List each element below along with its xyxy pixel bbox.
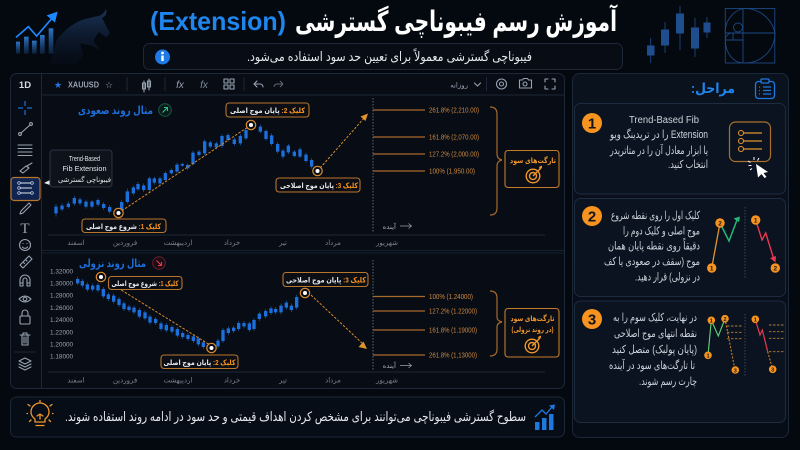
icon: smile: [20, 240, 30, 250]
icon: growth chart: [535, 404, 555, 430]
price axis: 1.28000: [50, 292, 74, 300]
target box: profit targets in downtrend: [505, 308, 559, 357]
heading: downtrend example: مثال روند نزولی: [79, 258, 146, 270]
diagram: third click: 2: [723, 317, 727, 323]
icon: golden spiral: [725, 8, 775, 63]
callout: click 1: کلیک 1: شروع موج اصلی: [112, 279, 179, 288]
step 2 text: در نزولی) قرار دهید.: [635, 272, 700, 284]
target box: profit targets: تارگت‌های سود: [510, 156, 556, 165]
tooltip: Trend-Based Fib Extension: Fib Extension: [62, 164, 106, 173]
left tool sidebar: [11, 101, 40, 370]
step 1 text: Trend-Based Fib: [629, 115, 699, 126]
icon: selected fib tool: [11, 178, 40, 200]
step 1 text: یا ابزار معادل آن را در متاتریدر: [609, 143, 708, 157]
step 3 text: (پایان پولبک) متصل کنید: [612, 344, 697, 356]
icon: pencil: [20, 203, 31, 214]
callout: click 3: [283, 272, 368, 286]
step 2 text: موج اصلی و کلیک دوم را: [623, 226, 700, 238]
months axis: اسفند: [67, 378, 85, 384]
months axis: فروردین: [113, 378, 137, 384]
icon: decorative candlesticks: [648, 6, 710, 63]
icon: trend line: [19, 123, 32, 135]
tooltip: Trend-Based Fib Extension: فیبوناچی گسترشی: [58, 175, 111, 184]
top toolbar: [19, 77, 555, 92]
subtitle bar: فیبوناچی گسترشی معمولاً برای تعیین حد سود استفاده می‌شود.: [247, 48, 532, 65]
top toolbar: روزانه: [450, 82, 468, 90]
icon: text tool: T: [20, 221, 30, 237]
months axis: اسفند: [67, 240, 85, 247]
point 1: [114, 208, 123, 218]
point 2: [207, 343, 216, 353]
price axis: [50, 268, 74, 360]
step 3 text: چارت رسم شوند.: [639, 376, 697, 388]
top toolbar: XAUUSD: [68, 80, 99, 90]
fib levels: bullish: 100% (1,950.00): [429, 168, 475, 176]
diagram: third click: 1: [710, 318, 713, 324]
months axis: فروردین: [113, 240, 137, 247]
fib levels: bearish: 261.8% (1,13000): [429, 352, 477, 360]
icon: horizontal lines: [18, 145, 32, 156]
price axis: 1.20000: [50, 342, 74, 348]
step 2 text: کلیک اول را روی نقطه شروع: [611, 210, 701, 222]
tip text: سطوح گسترشی فیبوناچی می‌توانند برای مشخص کردن اهداف قیمتی و حد سود در ادامه روند استفاده شوند.: [65, 409, 526, 425]
step 3 text: در نهایت، کلیک سوم را به: [613, 312, 697, 324]
step 2 text: [604, 210, 701, 284]
top toolbar: fx: [176, 80, 185, 91]
badge 2: 2: [588, 208, 596, 226]
diagram: third click: [704, 314, 784, 377]
diagram: click order: 1: [710, 266, 714, 272]
tooltip: Trend-Based Fib Extension: Trend-Based: [69, 154, 100, 163]
top toolbar: ★: [54, 80, 62, 90]
tooltip: Trend-Based Fib Extension: [44, 150, 112, 187]
point 2: [246, 120, 256, 130]
icon: up arrow: [159, 104, 171, 116]
icon: fib tool with cursor: [730, 122, 770, 178]
callout: click 2: کلیک 2: پایان موج اصلی: [164, 358, 236, 367]
title: (Extension): [150, 6, 286, 36]
future label: [383, 222, 412, 231]
target box: profit targets in downtrend: تارگت‌های سود: [510, 314, 555, 323]
top toolbar: 1D: [19, 80, 31, 91]
months axis: شهریور: [375, 378, 398, 384]
icon: eye: [19, 296, 31, 302]
diagram: third click: 3: [734, 368, 737, 374]
step 1 text: انتخاب کنید.: [668, 159, 708, 171]
diagram: third click: 1: [754, 318, 757, 324]
icon: down arrow: [153, 257, 165, 269]
icon: lock: [20, 310, 30, 324]
candlesticks: downtrend: [78, 277, 297, 352]
step 2 text: موج (سقف در صعودی یا کف: [604, 256, 700, 268]
badge 1: [582, 113, 602, 133]
months axis: مرداد: [325, 240, 341, 247]
icon: bull and rising chart: [16, 9, 110, 64]
panel: chart workspace: [10, 74, 564, 388]
months axis: [67, 378, 398, 384]
badge 3: [582, 309, 602, 329]
callout: click 3: کلیک 3: پایان موج اصلاحی: [280, 181, 359, 190]
step card 3: [574, 301, 786, 422]
callout: click 3: کلیک 3: پایان موج اصلاحی: [286, 276, 367, 284]
fib levels: bullish: 127.2% (2,000.00): [429, 152, 479, 158]
fib levels: bullish: 261.8% (2,210.00): [429, 108, 479, 114]
step 3 text: نقطه انتهای موج اصلاحی: [614, 328, 697, 340]
step 2 text: دقیقاً روی نقطه پایان همان: [608, 237, 700, 252]
months axis: اردیبهشت: [164, 240, 192, 247]
diagram: third click: 1: [706, 354, 710, 360]
badge 2: [582, 206, 602, 226]
months axis: خرداد: [224, 240, 240, 247]
fib levels: bearish: 127.2% (1.22000): [429, 308, 477, 316]
price axis: 1.22000: [50, 330, 74, 336]
step card 2: [574, 198, 786, 296]
heading: uptrend example: مثال روند صعودی: [78, 105, 153, 117]
dashed wave lines: [118, 288, 367, 349]
point 1: [96, 272, 106, 282]
callout: click 1: [82, 219, 166, 232]
fib levels: bearish: 161.8% (1.19000): [429, 328, 477, 334]
price axis: 1.30000: [50, 280, 74, 288]
step 1 text: Extension را در تریدینگ ویو: [609, 128, 708, 141]
icon: clipboard: [756, 79, 774, 98]
diagram: click order: 1: [754, 218, 758, 224]
diagram: click order: 2: [773, 266, 777, 272]
top toolbar: fx: [200, 80, 209, 91]
subtitle bar: [144, 44, 622, 70]
diagram: click order: [707, 207, 780, 279]
step card 1: [574, 104, 786, 194]
panel: bullish chart: [48, 98, 559, 247]
title: آموزش رسم فیبوناچی گسترشی: [295, 4, 618, 38]
icon: trash: [20, 333, 30, 345]
months axis: تیر: [278, 378, 287, 384]
callout: click 2: [161, 355, 238, 368]
heading: steps: مراحل:: [691, 80, 735, 97]
diagram: click order: 2: [718, 220, 722, 228]
callout: click 2: [226, 103, 309, 117]
fib levels: bearish: [373, 294, 477, 360]
target box: profit targets: [505, 150, 559, 188]
point 3: [300, 288, 310, 298]
icon: crosshair: [18, 101, 32, 115]
icon: layers: [19, 358, 31, 370]
callout: click 1: [108, 276, 182, 290]
panel: steps: [572, 74, 788, 438]
icon: pen tool: [20, 163, 32, 173]
panel: bottom tip bar: [10, 397, 564, 437]
icon: magnet: [20, 275, 30, 286]
fib levels: bullish: 161.8% (2,070.00): [429, 134, 479, 142]
icon: lightbulb: [27, 400, 53, 426]
icon: ruler: [20, 256, 32, 268]
months axis: [67, 240, 398, 247]
step 3 text: تا تارگت‌های سود در آینده: [609, 358, 695, 372]
icon: info: [155, 50, 170, 64]
callout: click 3: [276, 178, 360, 192]
dashed wave lines: [118, 114, 368, 213]
price axis: 1.24000: [50, 317, 74, 324]
candlesticks: uptrend: [56, 125, 312, 217]
future label: آینده: [383, 222, 397, 231]
diagram: third click: 3: [771, 368, 774, 374]
months axis: اردیبهشت: [164, 378, 192, 384]
step 3 text: [609, 312, 697, 388]
badge 1: 1: [588, 116, 596, 132]
price axis: 1.18000: [50, 354, 74, 360]
months axis: خرداد: [224, 378, 240, 384]
callout: click 2: کلیک 2: پایان موج اصلی: [230, 106, 306, 115]
fib levels: bearish: 100% (1.24000): [429, 294, 473, 301]
price axis: 1.26000: [50, 305, 74, 312]
callout: click 1: کلیک 1: شروع موج اصلی: [86, 222, 162, 231]
price axis: 1.32000: [50, 268, 74, 276]
badge 3: 3: [588, 312, 596, 328]
bracket: [490, 291, 502, 356]
step 1 text: [609, 115, 708, 171]
months axis: مرداد: [325, 378, 341, 384]
future label: آینده: [383, 361, 397, 370]
bracket: [490, 107, 502, 215]
months axis: شهریور: [375, 240, 398, 247]
panel: bearish chart: [48, 257, 559, 384]
point 3: [313, 166, 322, 176]
fib levels: bullish: [373, 108, 479, 176]
title: [150, 4, 618, 38]
target box: profit targets in downtrend: (در روند نزولی): [512, 327, 554, 334]
top toolbar: ☆: [105, 80, 113, 90]
months axis: تیر: [278, 240, 287, 247]
future label: [383, 361, 412, 370]
